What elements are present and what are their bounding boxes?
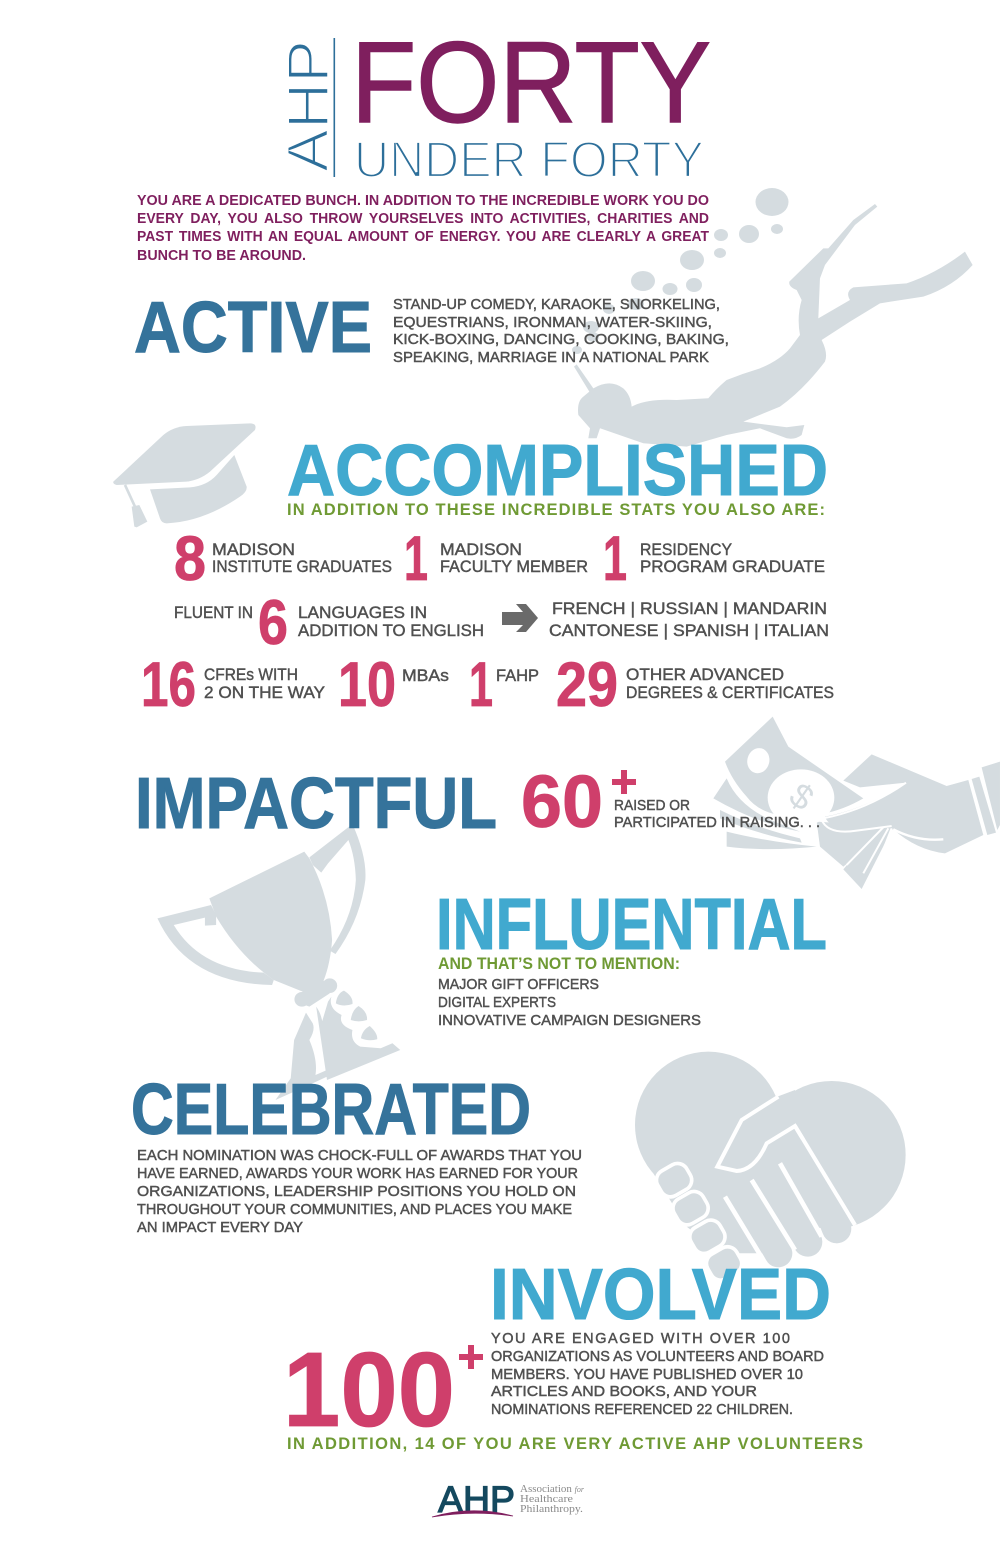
celebrated paragraph: EACH NOMINATION WAS CHOCK-FULL OF AWARDS THAT YOU	[137, 1148, 582, 1164]
stat: 60+ raised: 60	[521, 760, 603, 843]
heading: influential: INFLUENTIAL	[436, 885, 827, 965]
logo: Association for	[520, 1483, 585, 1495]
stat: 1 FAHP: 1	[469, 650, 493, 720]
stat: 1 faculty member: MADISON	[440, 540, 522, 559]
stat: 16 CFREs: 16	[141, 650, 196, 720]
celebrated paragraph	[137, 1148, 582, 1236]
icon: diver silhouette	[574, 204, 973, 447]
celebrated paragraph: HAVE EARNED, AWARDS YOUR WORK HAS EARNED FOR YOUR	[137, 1166, 578, 1182]
involved paragraph: ARTICLES AND BOOKS, AND YOUR	[491, 1384, 757, 1400]
heading: celebrated: CELEBRATED	[131, 1070, 531, 1150]
influential text	[438, 955, 701, 1029]
active list: STAND-UP COMEDY, KARAOKE, SNORKELING,	[393, 297, 720, 313]
stat: 60+ raised	[521, 760, 820, 843]
stat: 1 FAHP: FAHP	[496, 666, 539, 685]
intro paragraph	[137, 193, 709, 264]
involved paragraph	[491, 1331, 824, 1418]
stat: 1 residency graduate	[603, 524, 825, 594]
accomplished subheading: IN ADDITION TO THESE INCREDIBLE STATS YOU ALSO ARE:	[287, 501, 825, 519]
celebrated paragraph: AN IMPACT EVERY DAY	[137, 1220, 303, 1236]
involved paragraph: ORGANIZATIONS AS VOLUNTEERS AND BOARD	[491, 1349, 824, 1365]
stat: 10 MBAs	[338, 650, 449, 720]
languages list	[549, 599, 829, 640]
stat: 8 Madison graduates: INSTITUTE GRADUATES	[212, 557, 392, 576]
AHP vertical label: AHP	[276, 40, 341, 172]
icon: bubbles	[572, 188, 788, 354]
stat: 1 faculty member: FACULTY MEMBER	[440, 557, 588, 576]
stat: 8 Madison graduates: MADISON	[212, 540, 295, 559]
languages list: CANTONESE | SPANISH | ITALIAN	[549, 621, 829, 640]
volunteers line: IN ADDITION, 14 OF YOU ARE VERY ACTIVE AHP VOLUNTEERS	[287, 1435, 863, 1453]
stat: 29 other degrees: 29	[556, 650, 618, 720]
languages list: FRENCH | RUSSIAN | MANDARIN	[552, 599, 827, 618]
stat: 16 CFREs: 2 ON THE WAY	[204, 683, 325, 702]
active list: SPEAKING, MARRIAGE IN A NATIONAL PARK	[393, 350, 709, 366]
influential text: AND THAT’S NOT TO MENTION:	[438, 955, 680, 973]
stat: 8 Madison graduates	[174, 524, 392, 594]
stat: 29 other degrees	[556, 650, 834, 720]
involved paragraph: NOMINATIONS REFERENCED 22 CHILDREN.	[491, 1402, 793, 1418]
intro paragraph: BUNCH TO BE AROUND.	[137, 248, 306, 264]
intro paragraph: YOU ARE A DEDICATED BUNCH. IN ADDITION TO THE INCREDIBLE WORK YOU DO	[137, 193, 709, 209]
involved paragraph: MEMBERS. YOU HAVE PUBLISHED OVER 10	[491, 1367, 803, 1383]
active list: KICK-BOXING, DANCING, COOKING, BAKING,	[393, 332, 729, 348]
stat: 1 FAHP	[469, 650, 539, 720]
stat: 6 languages: 6	[258, 588, 288, 658]
title	[276, 19, 711, 188]
stat: 1 residency graduate: RESIDENCY	[640, 540, 732, 559]
FORTY: FORTY	[351, 19, 711, 147]
influential text: MAJOR GIFT OFFICERS	[438, 977, 599, 993]
stat: 16 CFREs	[141, 650, 325, 720]
intro paragraph: EVERY DAY, YOU ALSO THROW YOURSELVES INTO ACTIVITIES, CHARITIES AND	[137, 211, 709, 227]
stat: 60+ raised: RAISED OR	[614, 798, 690, 814]
logo: Healthcare	[520, 1493, 573, 1505]
heading: active: ACTIVE	[134, 288, 372, 368]
celebrated paragraph: THROUGHOUT YOUR COMMUNITIES, AND PLACES YOU MAKE	[137, 1202, 572, 1218]
influential text: DIGITAL EXPERTS	[438, 995, 556, 1011]
celebrated paragraph: ORGANIZATIONS, LEADERSHIP POSITIONS YOU HOLD ON	[137, 1184, 576, 1200]
stat: 6 languages: ADDITION TO ENGLISH	[298, 621, 484, 640]
logo	[432, 1479, 585, 1520]
arrow	[502, 604, 538, 632]
stat: 10 MBAs: 10	[338, 650, 396, 720]
stat: 60+ raised: PARTICIPATED IN RAISING. . .	[614, 815, 820, 831]
active list	[393, 297, 729, 366]
icon: trophy	[157, 824, 400, 1100]
logo: AHP	[438, 1479, 515, 1520]
influential text: INNOVATIVE CAMPAIGN DESIGNERS	[438, 1013, 701, 1029]
active list: EQUESTRIANS, IRONMAN, WATER-SKIING,	[393, 315, 712, 331]
stat: 1 residency graduate: 1	[603, 524, 627, 594]
icon: money in hand	[713, 717, 1000, 889]
stat: 100+: 100	[283, 1331, 455, 1449]
heading: involved: INVOLVED	[490, 1255, 831, 1335]
stat: 16 CFREs: CFREs WITH	[204, 665, 298, 684]
stat: 1 residency graduate: PROGRAM GRADUATE	[640, 557, 825, 576]
stat: 8 Madison graduates: 8	[174, 524, 206, 594]
logo: Philanthropy.	[520, 1503, 583, 1515]
UNDER FORTY: UNDER FORTY	[354, 131, 704, 188]
stat: 6 languages	[174, 588, 484, 658]
stat: 1 faculty member: 1	[404, 524, 428, 594]
icon: handshake heart	[635, 1052, 906, 1284]
heading: impactful: IMPACTFUL	[135, 764, 497, 844]
stat: 10 MBAs: MBAs	[402, 666, 449, 685]
stat: 6 languages: FLUENT IN	[174, 603, 253, 622]
heading: accomplished: ACCOMPLISHED	[287, 431, 828, 511]
dollar sign: $	[782, 775, 821, 819]
involved paragraph: YOU ARE ENGAGED WITH OVER 100	[491, 1331, 790, 1347]
icon: graduation cap	[113, 423, 256, 527]
intro paragraph: PAST TIMES WITH AN EQUAL AMOUNT OF ENERGY. YOU ARE CLEARLY A GREAT	[137, 229, 709, 245]
stat: 29 other degrees: DEGREES & CERTIFICATES	[626, 683, 834, 702]
stat: 6 languages: LANGUAGES IN	[298, 603, 427, 622]
stat: 1 faculty member	[404, 524, 588, 594]
stat: 29 other degrees: OTHER ADVANCED	[626, 665, 784, 684]
